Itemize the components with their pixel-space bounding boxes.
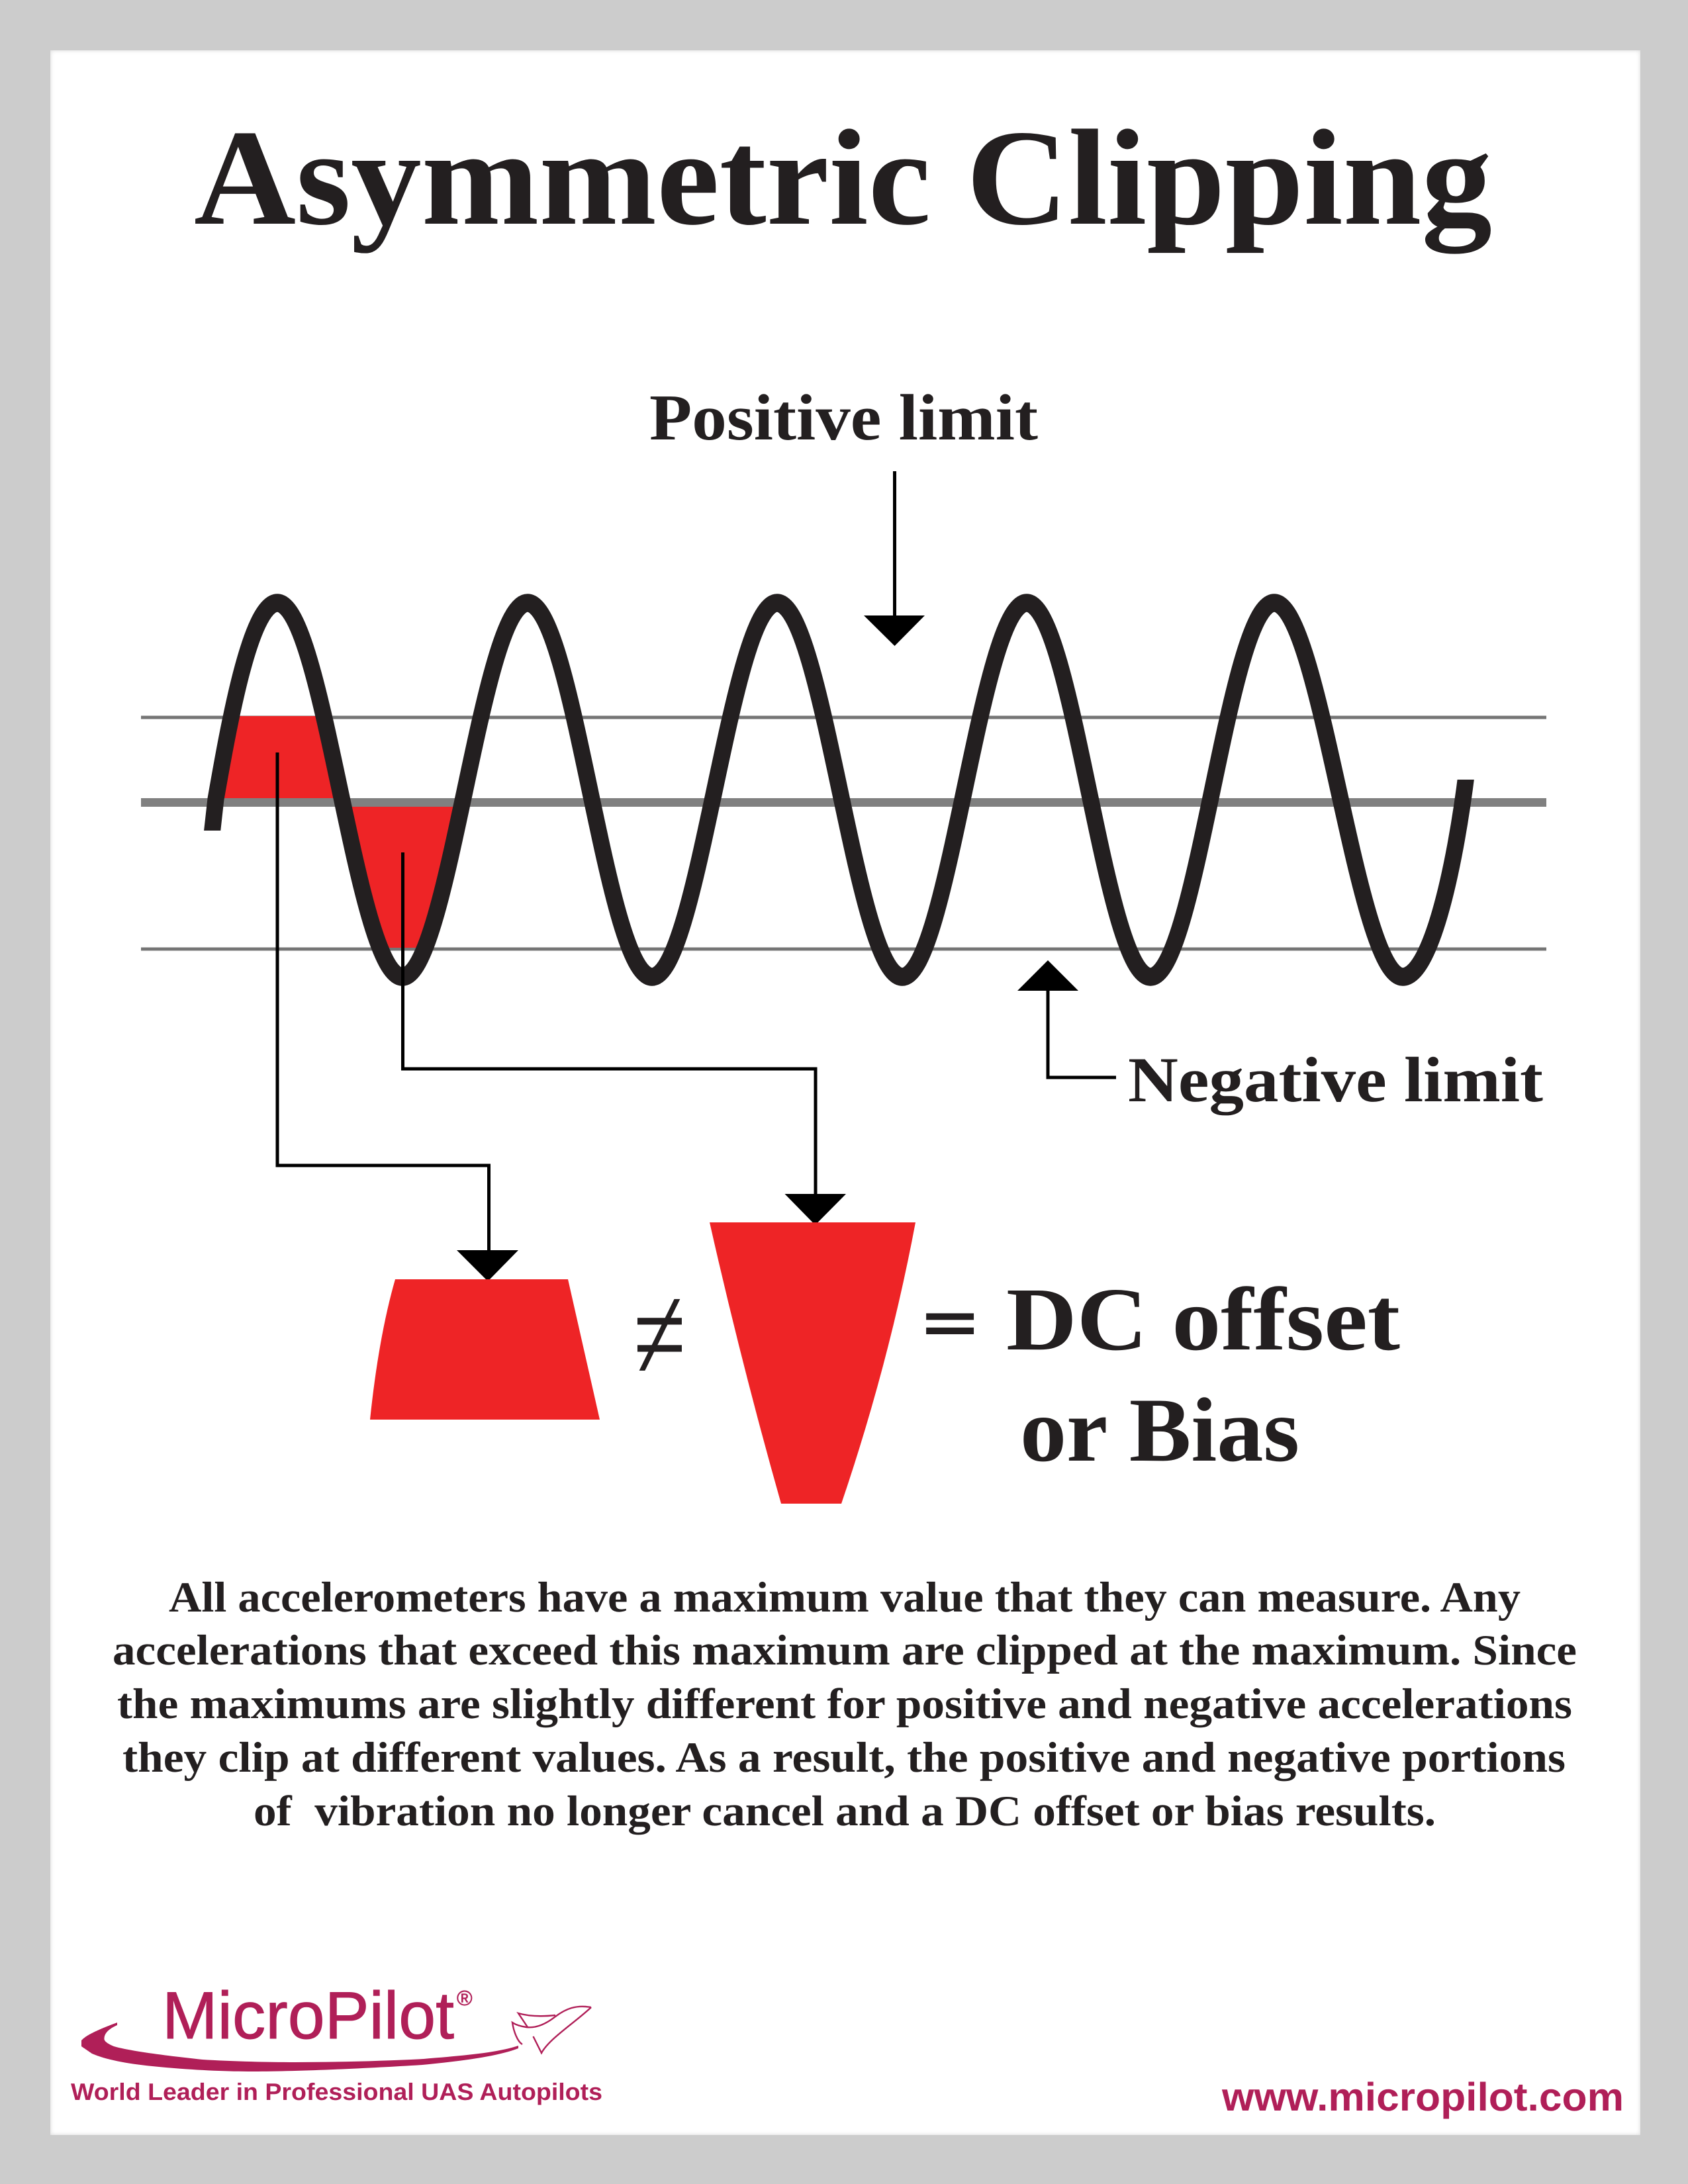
- shape: negative area: [710, 1222, 915, 1504]
- body text: they clip at different values. As a result, the positive and negative portions: [122, 1734, 1566, 1782]
- arrow: positive limit: [864, 471, 925, 646]
- positive limit line: [141, 716, 1546, 719]
- arrow: negative limit: [1017, 960, 1116, 1077]
- zero axis line: [141, 798, 1546, 807]
- label: positive limit: Positive limit: [649, 382, 1038, 454]
- symbol: equals: =: [923, 1285, 978, 1363]
- logo: MicroPilot: [71, 1979, 602, 2105]
- icon: aircraft outline: [512, 2007, 591, 2053]
- logo wordmark: MicroPilot: [162, 1979, 454, 2053]
- swoosh: [81, 2023, 518, 2071]
- chart: clipped vibration waveform: [141, 603, 1546, 977]
- registered mark: ®: [457, 1986, 473, 2010]
- red area: negative clipped region: [348, 807, 459, 948]
- result label: or Bias: [1020, 1379, 1299, 1480]
- body text: All accelerometers have a maximum value that they can measure. Any: [169, 1574, 1521, 1621]
- negative limit line: [141, 948, 1546, 950]
- result label: [1006, 1270, 1400, 1480]
- connector: positive region to trapezoid: [277, 752, 518, 1281]
- body text: accelerations that exceed this maximum are clipped at the maximum. Since: [113, 1627, 1577, 1674]
- website url: www.micropilot.com: [1221, 2075, 1624, 2119]
- red area: positive clipped region: [219, 716, 340, 798]
- label: negative limit: Negative limit: [1128, 1044, 1543, 1116]
- tagline: World Leader in Professional UAS Autopilots: [71, 2078, 602, 2105]
- connector: negative region to tall shape: [402, 852, 846, 1225]
- body text: the maximums are slightly different for positive and negative accelerations: [117, 1680, 1572, 1728]
- shape: positive area: [370, 1279, 600, 1420]
- sine wave: [211, 603, 1467, 977]
- body text: of vibration no longer cancel and a DC offset or bias results.: [254, 1788, 1436, 1835]
- result label: DC offset: [1006, 1270, 1400, 1369]
- body text: [113, 1574, 1577, 1835]
- title: Asymmetric Clipping: [194, 102, 1492, 254]
- symbol: not equal: ≠: [633, 1259, 686, 1410]
